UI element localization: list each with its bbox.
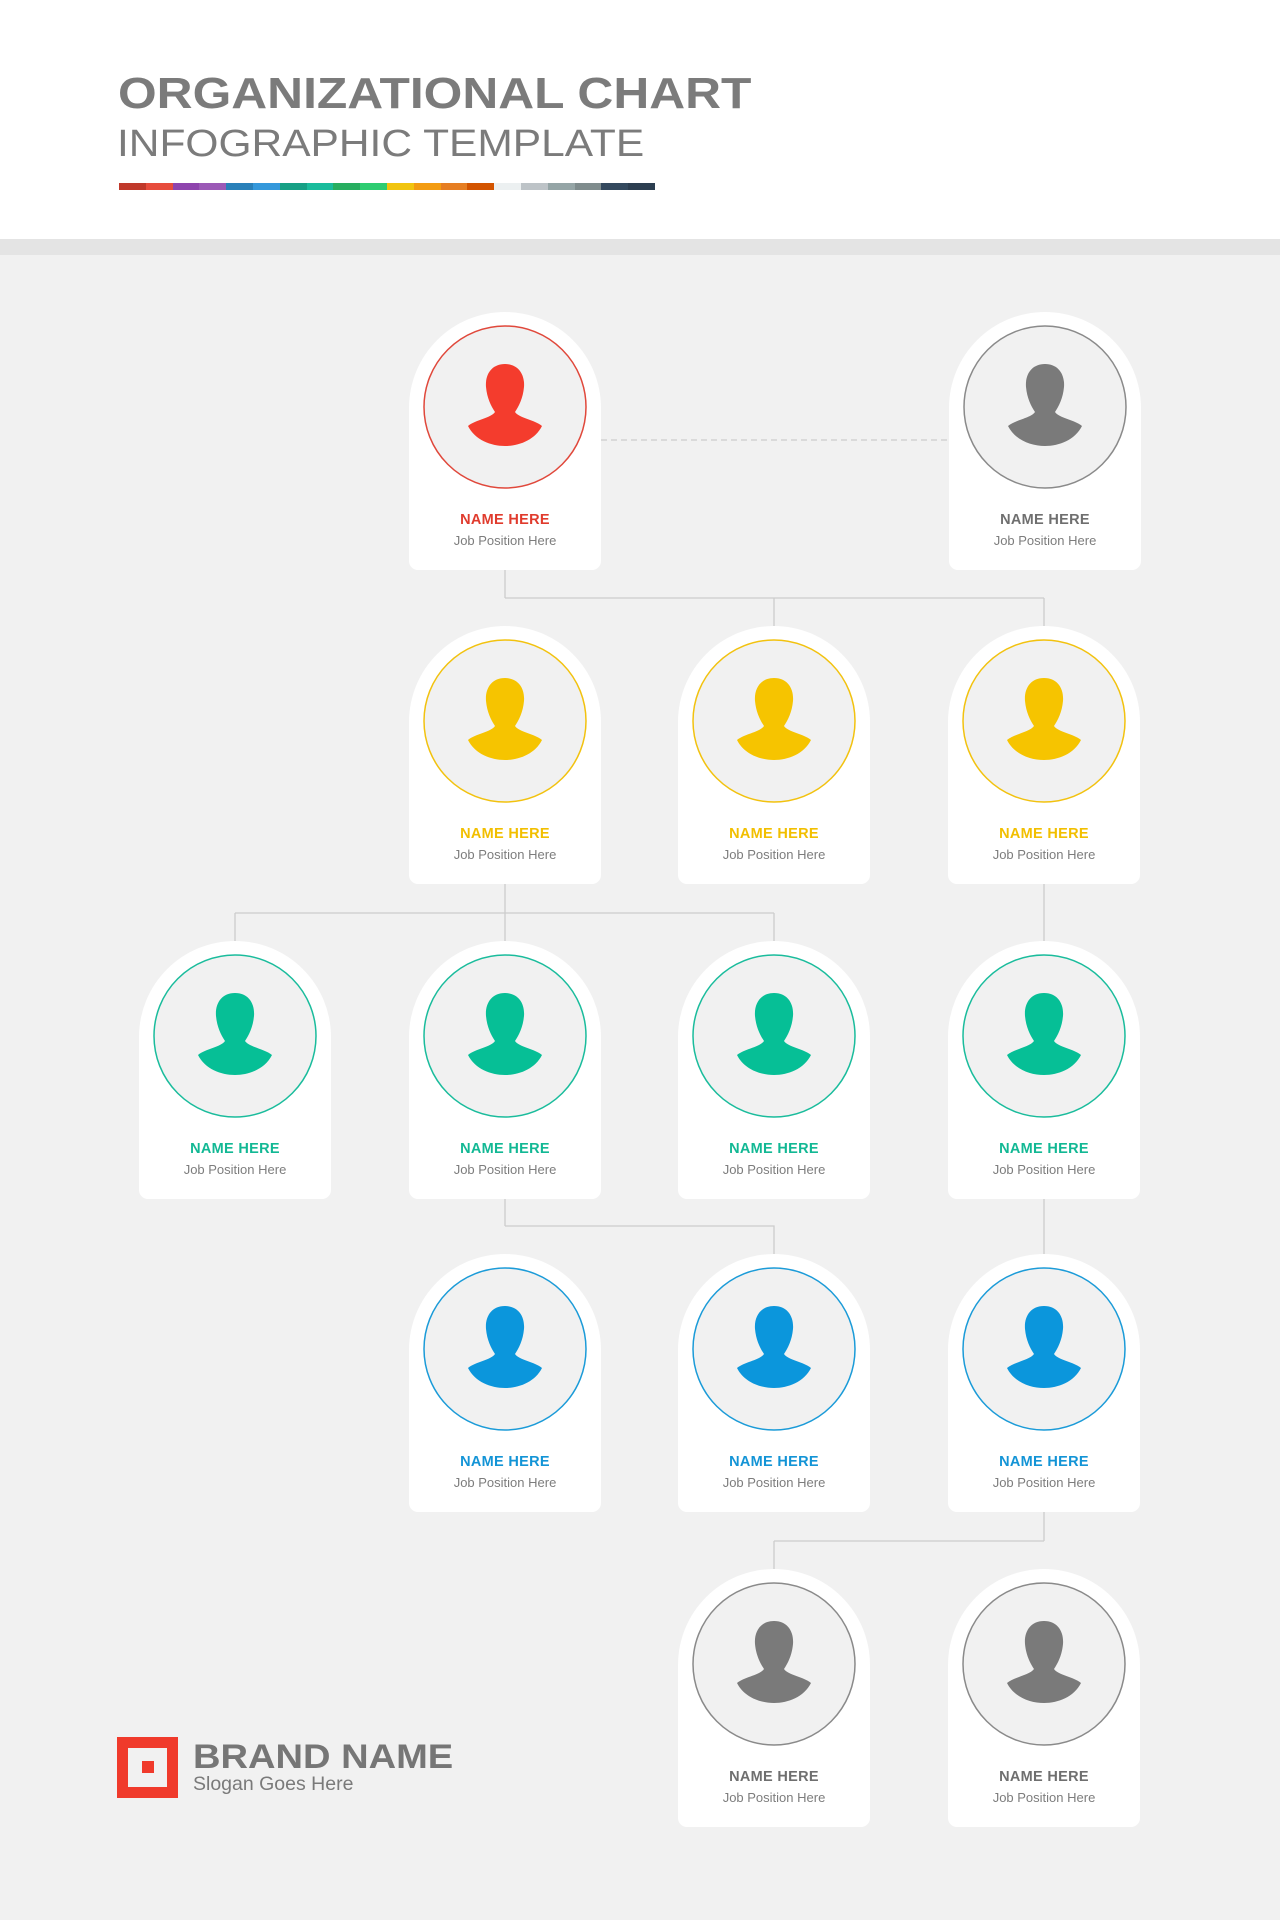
card: row3 col3 (green): Job Position Here [723, 1162, 825, 1177]
header background [0, 0, 1280, 239]
card: row5 col4 (gray) [948, 1569, 1140, 1827]
color bar [119, 183, 655, 190]
card: assistant (gray): NAME HERE [1000, 512, 1090, 528]
card: row3 col3 (green) [678, 941, 870, 1199]
card: row4 col3 (blue): NAME HERE [729, 1454, 819, 1470]
card: row2 col4 (yellow): Job Position Here [993, 847, 1095, 862]
card: row5 col4 (gray): Job Position Here [993, 1790, 1095, 1805]
card: row4 col2 (blue): Job Position Here [454, 1475, 556, 1490]
card: row5 col3 (gray): NAME HERE [729, 1769, 819, 1785]
brand block [117, 1737, 453, 1798]
card: row3 col4 (green): NAME HERE [999, 1141, 1089, 1157]
card: row3 col1 (green): Job Position Here [184, 1162, 286, 1177]
card: row4 col4 (blue) [948, 1254, 1140, 1512]
subtitle: INFOGRAPHIC TEMPLATE [117, 123, 644, 165]
card: row2 col2 (yellow): Job Position Here [454, 847, 556, 862]
card: assistant (gray): Job Position Here [994, 533, 1096, 548]
card: row2 col3 (yellow): NAME HERE [729, 826, 819, 842]
card: row5 col3 (gray) [678, 1569, 870, 1827]
card: row4 col2 (blue): NAME HERE [460, 1454, 550, 1470]
card: row2 col2 (yellow): NAME HERE [460, 826, 550, 842]
card: row2 col4 (yellow) [948, 626, 1140, 884]
card: top manager (red): NAME HERE [460, 512, 550, 528]
card: row3 col4 (green) [948, 941, 1140, 1199]
card: row4 col3 (blue): Job Position Here [723, 1475, 825, 1490]
card: row4 col3 (blue) [678, 1254, 870, 1512]
card: row3 col2 (green): NAME HERE [460, 1141, 550, 1157]
card: assistant (gray) [949, 312, 1141, 570]
card: row3 col3 (green): NAME HERE [729, 1141, 819, 1157]
card: row2 col2 (yellow) [409, 626, 601, 884]
card: row4 col4 (blue): Job Position Here [993, 1475, 1095, 1490]
card: row2 col3 (yellow): Job Position Here [723, 847, 825, 862]
card: row5 col4 (gray): NAME HERE [999, 1769, 1089, 1785]
card: row4 col4 (blue): NAME HERE [999, 1454, 1089, 1470]
card: row2 col4 (yellow): NAME HERE [999, 826, 1089, 842]
card: top manager (red) [409, 312, 601, 570]
card: row3 col2 (green) [409, 941, 601, 1199]
card: row3 col1 (green) [139, 941, 331, 1199]
slogan: Slogan Goes Here [193, 1773, 353, 1795]
title: ORGANIZATIONAL CHART [118, 69, 751, 118]
card: row3 col2 (green): Job Position Here [454, 1162, 556, 1177]
card: row3 col1 (green): NAME HERE [190, 1141, 280, 1157]
brand name: BRAND NAME [193, 1738, 453, 1776]
card: row5 col3 (gray): Job Position Here [723, 1790, 825, 1805]
card: row4 col2 (blue) [409, 1254, 601, 1512]
icon: brand logo [117, 1737, 178, 1798]
card: row3 col4 (green): Job Position Here [993, 1162, 1095, 1177]
card: row2 col3 (yellow) [678, 626, 870, 884]
card: top manager (red): Job Position Here [454, 533, 556, 548]
